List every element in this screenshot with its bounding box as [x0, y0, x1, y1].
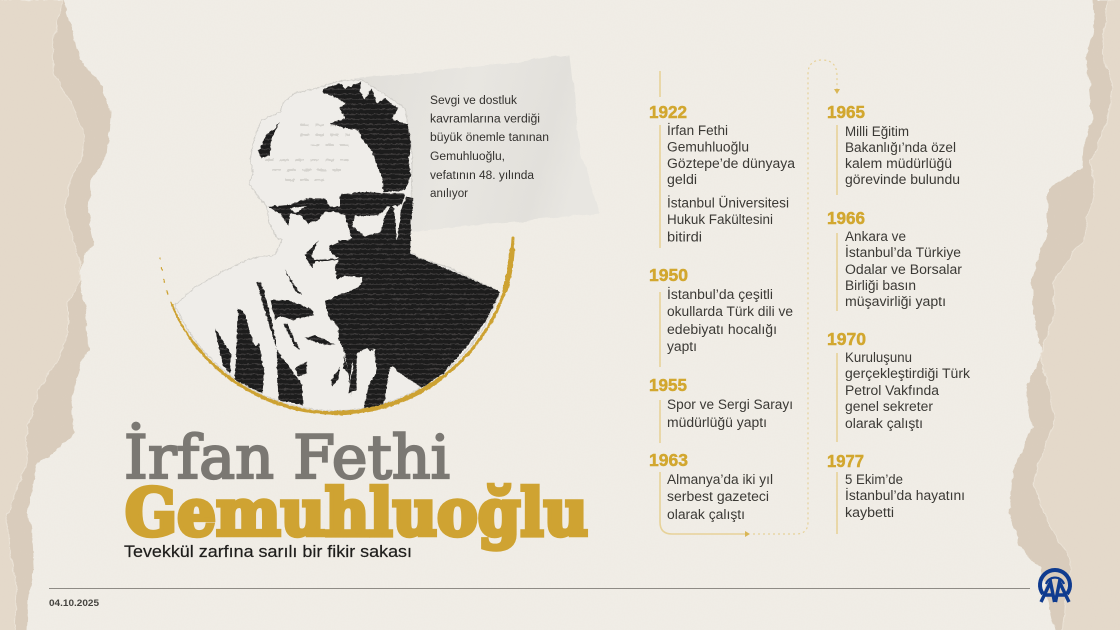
timeline entry 1963: 1963: [649, 450, 688, 470]
timeline entry 1922: [649, 102, 796, 248]
timeline entry 1966: [827, 208, 963, 311]
timeline entry 1977: kaybetti: [845, 505, 894, 520]
timeline entry 1963: Almanya’da iki yıl: [667, 472, 773, 487]
timeline entry 1963: serbest gazeteci: [667, 489, 769, 504]
timeline entry 1922: Hukuk Fakültesini: [667, 212, 773, 227]
timeline entry 1966: Odalar ve Borsalar: [845, 262, 963, 277]
note text: [430, 95, 549, 200]
timeline entry 1977: 5 Ekim’de: [845, 472, 903, 487]
timeline entry 1922: İrfan Fethi: [667, 123, 728, 138]
right torn paper edge: [1009, 0, 1120, 630]
timeline entry 1965: görevinde bulundu: [845, 172, 960, 187]
timeline entry 1966: İstanbul’da Türkiye: [845, 245, 961, 260]
date: 04.10.2025: [49, 598, 100, 609]
hair: [323, 82, 411, 192]
timeline entry 1966: müşavirliği yaptı: [845, 294, 946, 309]
glasses and brow: [268, 192, 405, 227]
right face shadow: [328, 197, 413, 257]
timeline entry 1977: [827, 451, 965, 534]
light lens slash: [290, 206, 307, 213]
timeline entry 1963: [649, 450, 773, 522]
timeline entry 1970: 1970: [827, 329, 866, 349]
timeline entry 1955: [649, 375, 793, 443]
note text: Gemuhluoğlu,: [430, 151, 505, 163]
timeline entry 1966: Birliği basın: [845, 278, 916, 293]
shirt folds: [257, 282, 303, 405]
timeline entry 1965: Bakanlığı’nda özel: [845, 140, 956, 155]
portrait illustration: [175, 80, 500, 411]
note text: anılıyor: [430, 188, 468, 200]
timeline entry 1977: İstanbul’da hayatını: [845, 488, 965, 503]
timeline entry 1922: bitirdi: [667, 230, 702, 244]
timeline entry 1950: 1950: [649, 265, 688, 285]
timeline entry 1966: Ankara ve: [845, 229, 906, 244]
light right cheek: [352, 215, 382, 236]
timeline entry 1963: olarak çalıştı: [667, 507, 745, 522]
timeline entry 1922: 1922: [649, 102, 687, 122]
dark shapes: head: [258, 82, 413, 257]
timeline entry 1965: [827, 102, 960, 195]
timeline entry 1950: edebiyatı hocalığı: [667, 322, 777, 337]
dark shapes: body left: [215, 240, 357, 405]
forehead texture: [265, 125, 355, 180]
timeline entry 1970: [827, 329, 970, 442]
timeline entry 1970: gerçekleştirdiği Türk: [845, 366, 970, 381]
figure light silhouette: [175, 80, 500, 411]
timeline entry 1970: genel sekreter: [845, 399, 934, 414]
timeline entry 1970: Petrol Vakfında: [845, 383, 939, 398]
timeline entry 1922: Gemuhluoğlu: [667, 140, 749, 154]
logo: AA: [1040, 570, 1070, 602]
nose shadow: [305, 240, 355, 278]
collar and torso join: [325, 290, 355, 338]
note text: vefatının 48. yılında: [430, 170, 535, 182]
timeline entry 1977: 1977: [827, 451, 864, 471]
torn note paper: [355, 55, 600, 232]
timeline entry 1950: İstanbul’da çeşitli: [667, 287, 773, 302]
timeline entry 1955: 1955: [649, 375, 687, 395]
note text: kavramlarına verdiği: [430, 114, 540, 126]
note text: Sevgi ve dostluk: [430, 95, 517, 107]
title: first name: İrfan Fethi: [124, 423, 450, 493]
subtitle: Tevekkül zarfına sarılı bir fikir sakası: [124, 542, 412, 561]
left hair streak: [258, 122, 280, 158]
title: surname: Gemuhluoğlu: [125, 475, 588, 551]
timeline entry 1950: [649, 265, 793, 367]
timeline entry 1922: İstanbul Üniversitesi: [667, 196, 789, 210]
timeline entry 1965: kalem müdürlüğü: [845, 156, 952, 171]
timeline entry 1922: Göztepe’de dünyaya: [667, 156, 796, 171]
timeline entry 1970: olarak çalıştı: [845, 416, 923, 431]
note text: büyük önemle tanınan: [430, 132, 549, 144]
timeline entry 1922: geldi: [667, 172, 697, 187]
gold brush arc: [160, 238, 513, 413]
timeline entry 1966: 1966: [827, 208, 865, 228]
timeline entry 1965: 1965: [827, 102, 865, 122]
left torn paper edge: [0, 0, 111, 630]
timeline entry 1950: yaptı: [667, 339, 697, 354]
dark shapes: body right: [338, 240, 500, 408]
timeline entry 1965: Milli Eğitim: [845, 124, 909, 139]
timeline connector: [660, 60, 840, 537]
timeline entry 1970: Kuruluşunu: [845, 350, 912, 365]
timeline entry 1955: Spor ve Sergi Sarayı: [667, 397, 793, 412]
light lower shirt patches: [365, 348, 375, 372]
timeline entry 1955: müdürlüğü yaptı: [667, 415, 767, 430]
light chin patch: [320, 276, 362, 298]
timeline entry 1950: okullarda Türk dili ve: [667, 304, 793, 319]
